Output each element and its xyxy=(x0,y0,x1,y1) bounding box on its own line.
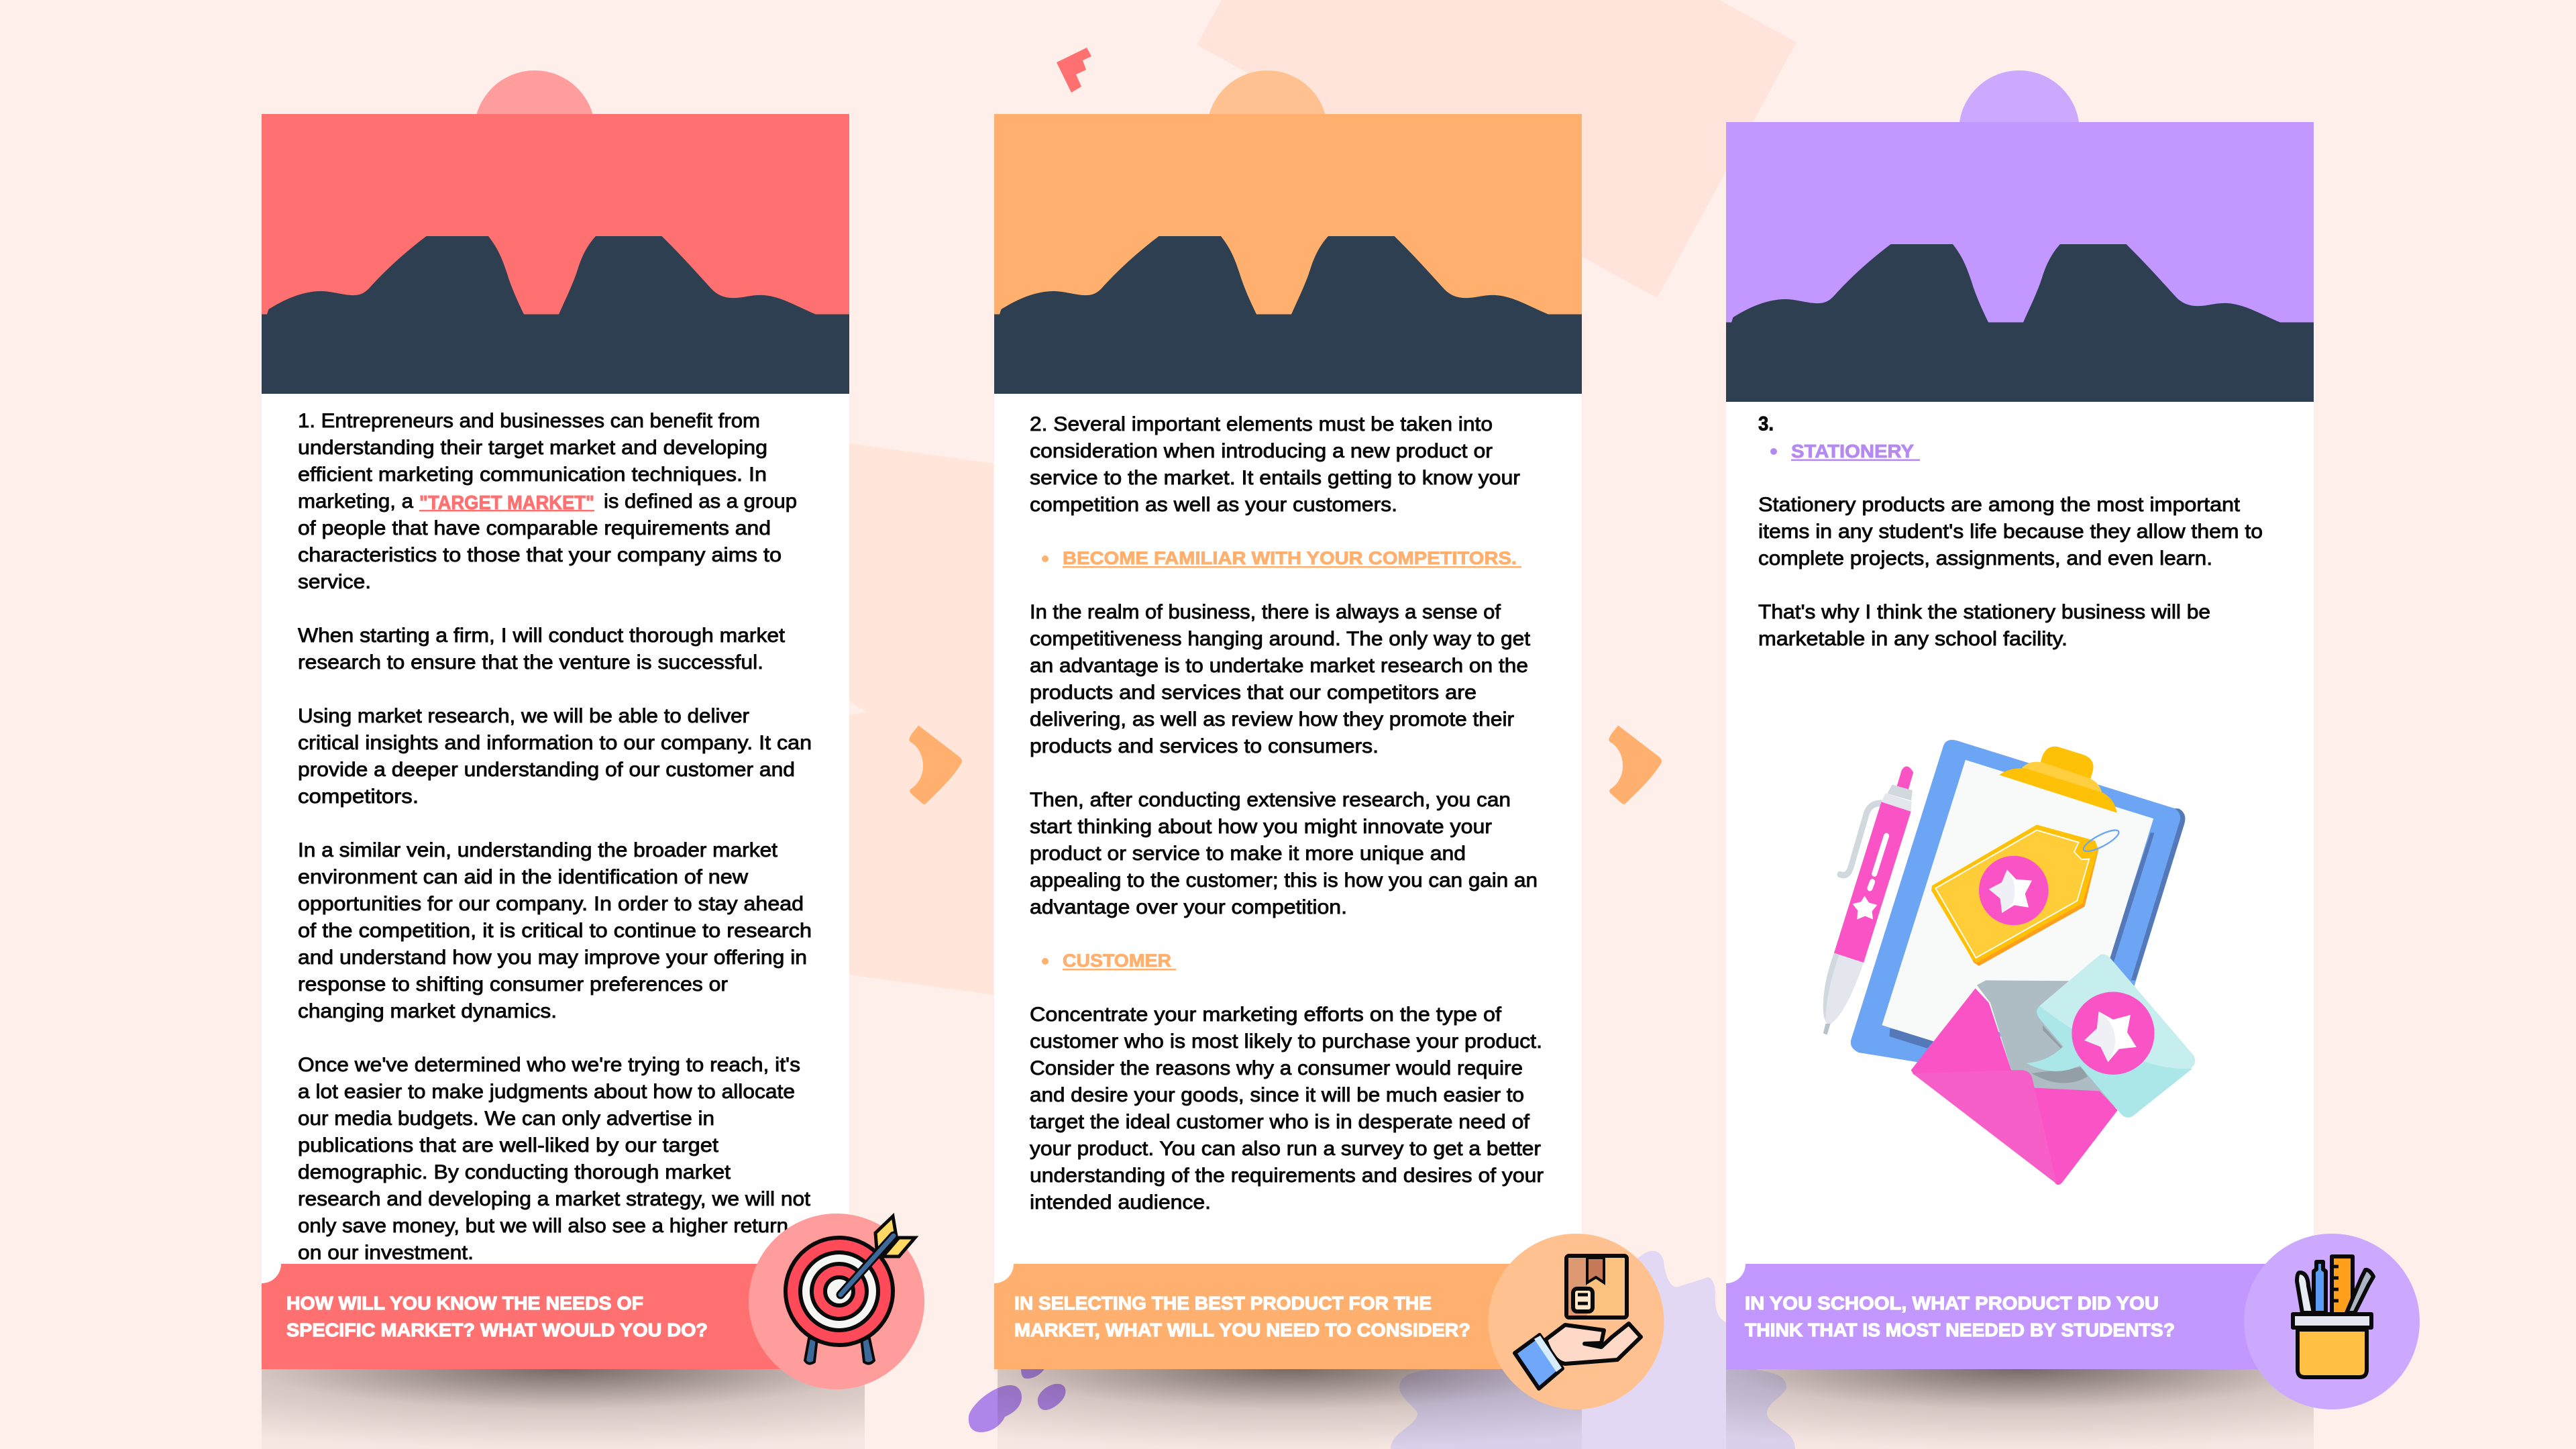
card 1 body text: opportunities for our company. In order to stay ahead xyxy=(298,893,804,915)
card 1 body text: service. xyxy=(298,571,371,593)
card 1 body text: our media budgets. We can only advertise in xyxy=(298,1108,714,1130)
card 3 body text: marketable in any school facility. xyxy=(1758,628,2068,650)
icon: pencil cup xyxy=(2293,1256,2373,1377)
card 2 body text: products and services that our competitors are xyxy=(1030,682,1477,704)
card 1 body text: environment can aid in the identification of new xyxy=(298,866,748,888)
card 2 body text: an advantage is to undertake market research on the xyxy=(1030,655,1528,677)
card 1 sun xyxy=(474,70,595,191)
card 1 body text: "TARGET MARKET" xyxy=(419,492,594,514)
card 3 icon circle xyxy=(2244,1234,2420,1409)
card 2 body text: your product. You can also run a survey to get a better xyxy=(1030,1138,1541,1160)
card 1 body text: Once we've determined who we're trying to reach, it's xyxy=(298,1054,800,1076)
card 3 body text: That's why I think the stationery business will be xyxy=(1758,601,2210,623)
card 2 body text: service to the market. It entails getting to know your xyxy=(1030,467,1520,489)
card 1 body background xyxy=(262,394,849,1286)
card 1 body text: changing market dynamics. xyxy=(298,1000,557,1022)
card 3 question: THINK THAT IS MOST NEEDED BY STUDENTS? xyxy=(1745,1320,2175,1340)
card 1 body text: of the competition, it is critical to continue to research xyxy=(298,920,812,942)
card 2 body text: start thinking about how you might innovate your xyxy=(1030,816,1492,838)
chevron arrow 1 xyxy=(909,726,962,804)
decorative shape: left band xyxy=(849,443,994,995)
card 1 body text: research and developing a market strategy, we will not xyxy=(298,1188,811,1210)
card 3 question: IN YOU SCHOOL, WHAT PRODUCT DID YOU xyxy=(1745,1293,2159,1313)
card 3 body text: 3. xyxy=(1758,413,1774,435)
card 2 body text: competitiveness hanging around. The only way to get xyxy=(1030,628,1531,650)
card 1 question xyxy=(286,1293,708,1340)
card 2 body text: and desire your goods, since it will be much easier to xyxy=(1030,1084,1524,1106)
card 1 body text: research to ensure that the venture is successful. xyxy=(298,651,763,674)
card 1 body text: demographic. By conducting thorough market xyxy=(298,1161,731,1183)
card 2 body text: CUSTOMER xyxy=(1063,951,1171,971)
card 1 body text xyxy=(298,410,812,1264)
card 1 body text: a lot easier to make judgments about how to allocate xyxy=(298,1081,795,1103)
card 1 body text: only save money, but we will also see a higher return xyxy=(298,1215,788,1237)
card 2 body text: competition as well as your customers. xyxy=(1030,494,1397,516)
decorative red glyph xyxy=(1057,48,1091,93)
card 2 header xyxy=(994,114,1582,315)
card 2 body text: target the ideal customer who is in desperate need of xyxy=(1030,1111,1530,1133)
card 2 body text: In the realm of business, there is always a sense of xyxy=(1030,601,1501,623)
card 1 body text: of people that have comparable requirements and xyxy=(298,517,771,539)
card 2 mountains xyxy=(994,236,1582,394)
card 1 body text: response to shifting consumer preferences or xyxy=(298,973,728,996)
card 1 body text: efficient marketing communication techniques. In xyxy=(298,464,767,486)
card 3 mountains xyxy=(1726,244,2314,402)
card 2 body text: BECOME FAMILIAR WITH YOUR COMPETITORS. xyxy=(1063,548,1517,568)
card 2 icon circle xyxy=(1488,1234,1664,1409)
card 1 body text: competitors. xyxy=(298,786,419,808)
card 3 header xyxy=(1726,122,2314,323)
card 3 banner xyxy=(1726,1264,2332,1369)
card 2 body text: consideration when introducing a new product or xyxy=(1030,440,1493,462)
card 1 body text: and understand how you may improve your offering in xyxy=(298,947,807,969)
card 1 body text: In a similar vein, understanding the broader market xyxy=(298,839,778,861)
card 1 body text: publications that are well-liked by our target xyxy=(298,1134,719,1157)
card 2 body text: products and services to consumers. xyxy=(1030,735,1379,757)
card 2 body text: delivering, as well as review how they promote their xyxy=(1030,708,1514,731)
panel: card 2 new product xyxy=(994,70,1664,1449)
panel: card 1 target market xyxy=(262,70,924,1449)
panel: card 3 stationery xyxy=(1726,70,2420,1449)
card 1 drop shadow xyxy=(262,1369,865,1449)
icon: parcel over open hand xyxy=(1515,1256,1641,1389)
card 1 body text: critical insights and information to our company. It can xyxy=(298,732,812,754)
card 1 body text: is defined as a group xyxy=(604,490,797,513)
card 2 body text: product or service to make it more unique and xyxy=(1030,843,1466,865)
chevron arrow 2 xyxy=(1609,726,1662,804)
card 1 body text: characteristics to those that your company aims to xyxy=(298,544,782,566)
card 1 body text: Using market research, we will be able to deliver xyxy=(298,705,749,727)
decorative shape: top pentagon xyxy=(1197,0,1796,298)
card 2 body text: 2. Several important elements must be taken into xyxy=(1030,413,1493,435)
card 1 body text: provide a deeper understanding of our customer and xyxy=(298,759,795,781)
icon: target with arrow xyxy=(786,1216,915,1364)
card 2 body text: Concentrate your marketing efforts on the type of xyxy=(1030,1004,1502,1026)
card 3 body text xyxy=(1758,413,2263,650)
card 3 body text: complete projects, assignments, and even learn. xyxy=(1758,547,2212,570)
card 3 body text: items in any student's life because they allow them to xyxy=(1758,521,2263,543)
card 2 body text: customer who is most likely to purchase your product. xyxy=(1030,1030,1542,1053)
card 2 drop shadow xyxy=(998,1369,1582,1449)
lavender blob xyxy=(1391,1251,1795,1449)
card 2 banner xyxy=(994,1264,1576,1369)
card 2 body text: advantage over your competition. xyxy=(1030,896,1347,918)
card 3 body background xyxy=(1726,402,2314,1286)
card 1 body text: marketing, a xyxy=(298,490,413,513)
card 2 body text: Consider the reasons why a consumer would require xyxy=(1030,1057,1523,1079)
card 1 icon circle xyxy=(749,1214,924,1389)
card 1 body text: When starting a firm, I will conduct thorough market xyxy=(298,625,786,647)
card 1 body text: on our investment. xyxy=(298,1242,474,1264)
card 2 question: IN SELECTING THE BEST PRODUCT FOR THE xyxy=(1014,1293,1432,1313)
card 3 drop shadow xyxy=(1726,1369,2314,1449)
card 1 header xyxy=(262,114,849,315)
card 2 question: MARKET, WHAT WILL YOU NEED TO CONSIDER? xyxy=(1014,1320,1470,1340)
card 3 body text: Stationery products are among the most important xyxy=(1758,494,2241,516)
card 1 body text: understanding their target market and developing xyxy=(298,437,767,459)
card 2 body text xyxy=(1030,413,1544,1214)
card 3 question xyxy=(1745,1293,2175,1340)
card 2 question xyxy=(1014,1293,1470,1340)
card 3 body text: STATIONERY xyxy=(1791,441,1914,462)
card 1 question: SPECIFIC MARKET? WHAT WOULD YOU DO? xyxy=(286,1320,708,1340)
card 2 body background xyxy=(994,394,1582,1286)
card 1 banner xyxy=(262,1264,839,1369)
card 2 body text: intended audience. xyxy=(1030,1191,1211,1214)
purple drops xyxy=(969,1368,1065,1432)
card 1 body text: 1. Entrepreneurs and businesses can benefit from xyxy=(298,410,760,432)
card 2 body text: Then, after conducting extensive research, you can xyxy=(1030,789,1511,811)
card 1 mountains xyxy=(262,236,849,394)
card 2 sun xyxy=(1207,70,1328,191)
card 3 sun xyxy=(1959,70,2080,191)
card 2 body text: appealing to the customer; this is how you can gain an xyxy=(1030,869,1538,892)
card 1 question: HOW WILL YOU KNOW THE NEEDS OF xyxy=(286,1293,643,1313)
card 2 body text: understanding of the requirements and desires of your xyxy=(1030,1165,1544,1187)
illustration: clipboard, tag, pen and envelope xyxy=(1823,740,2195,1185)
